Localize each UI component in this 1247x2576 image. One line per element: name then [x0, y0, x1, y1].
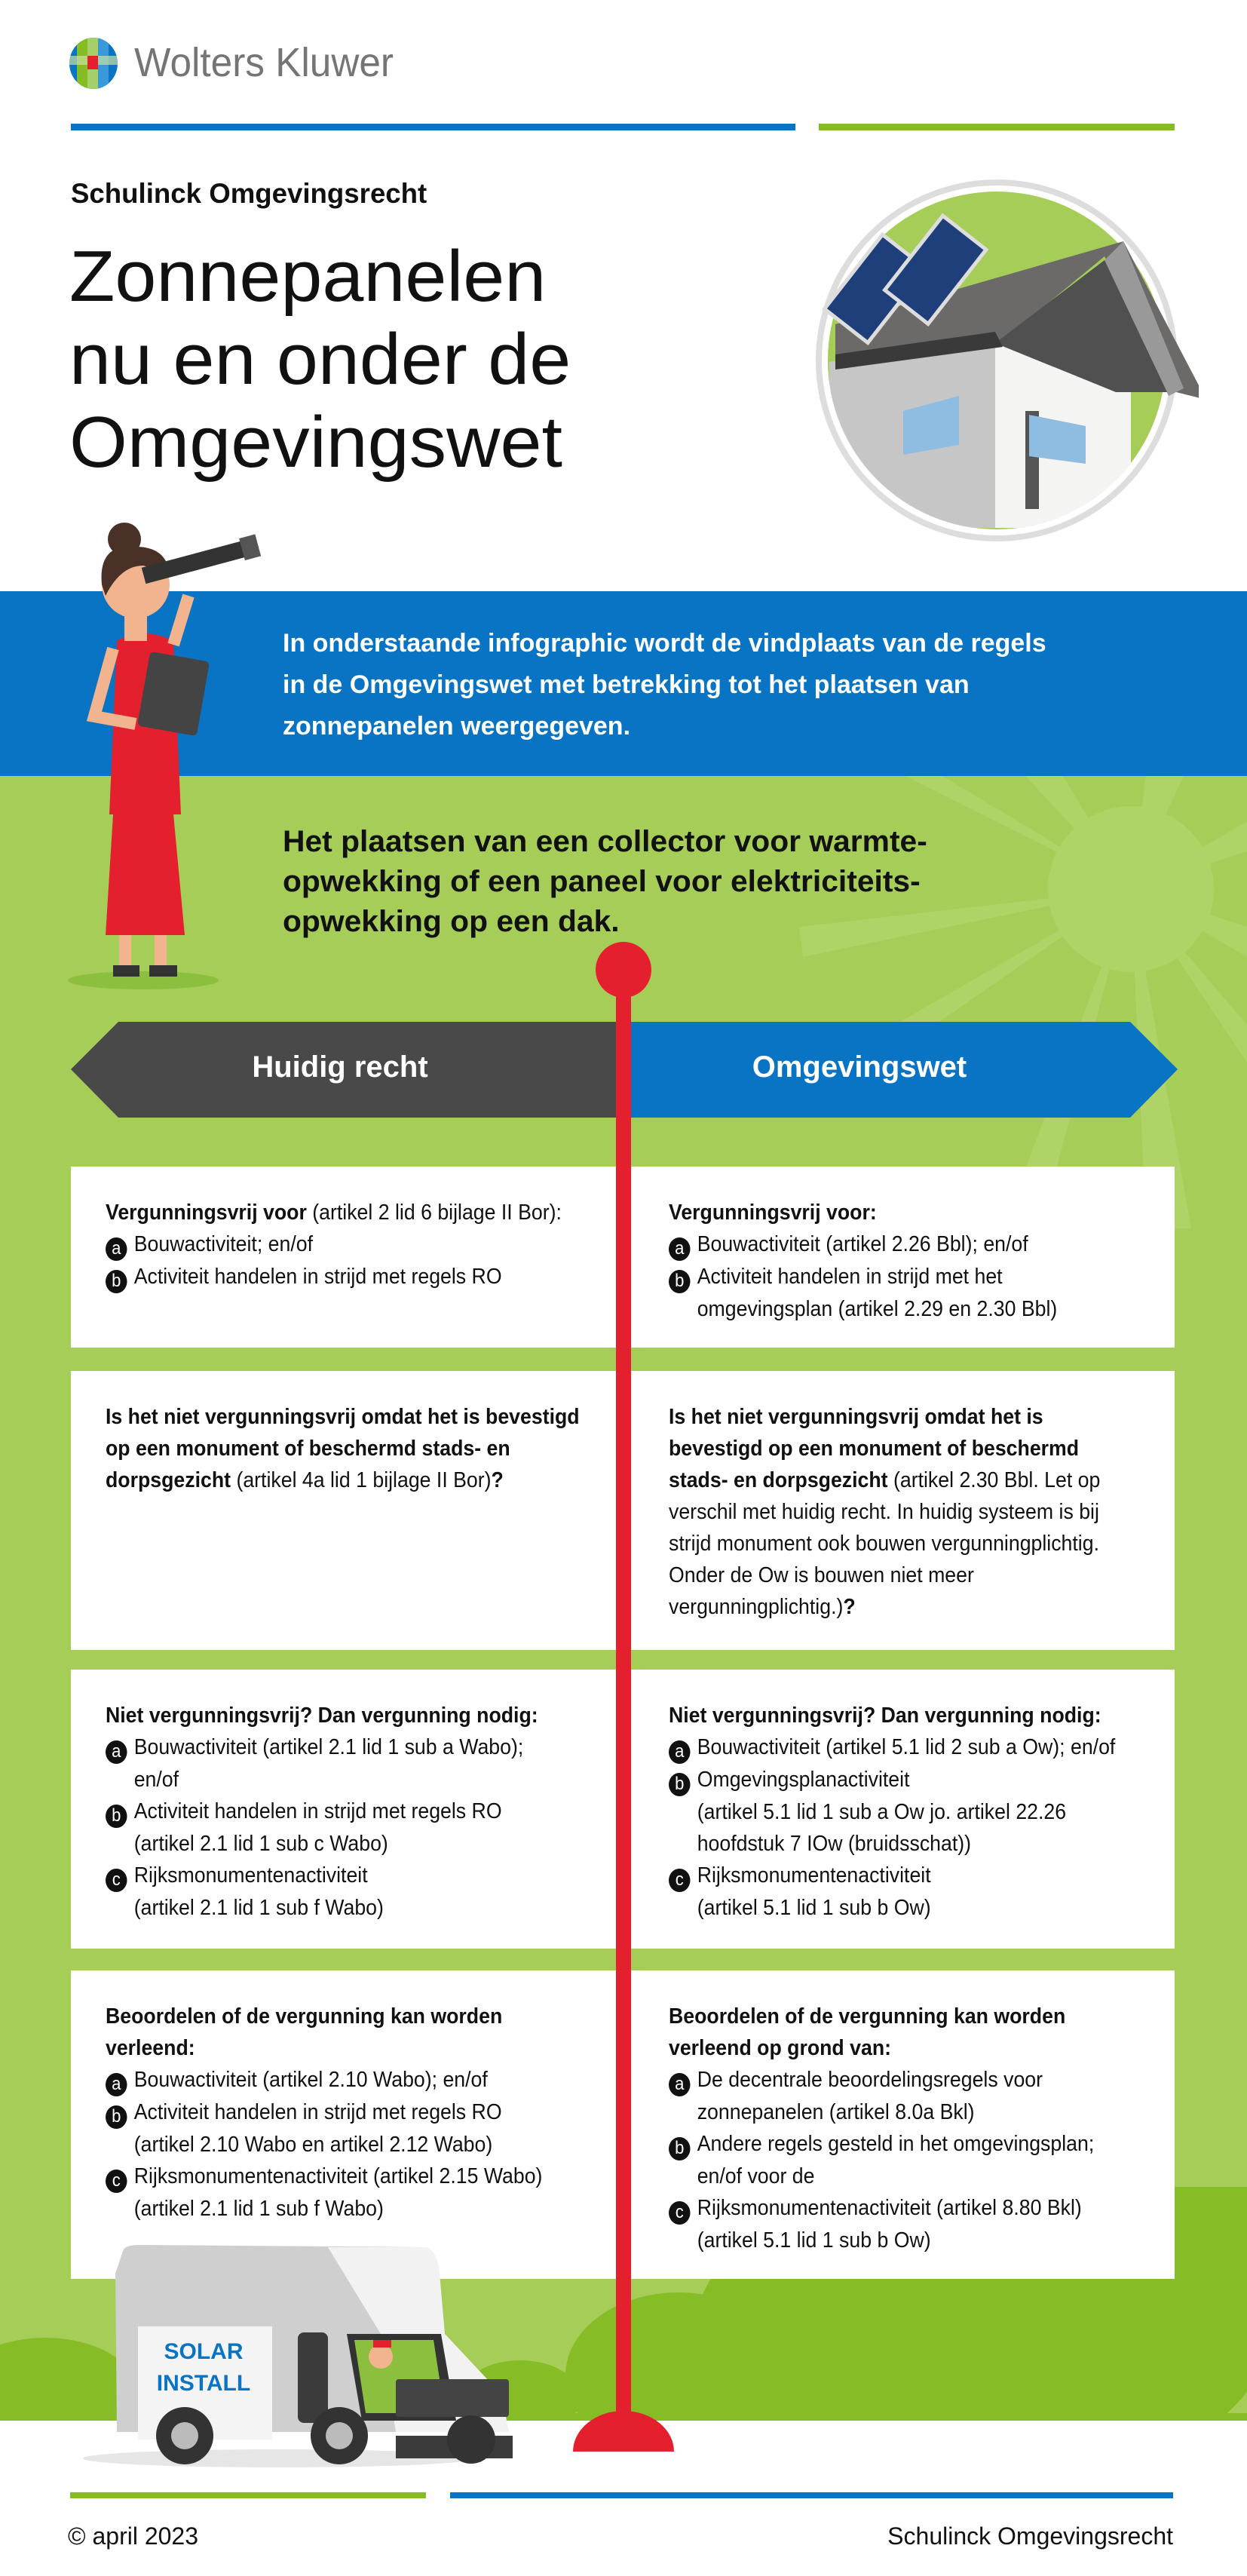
woman with telescope	[68, 523, 261, 989]
row 2 left: Is het niet vergunningsvrij omdat het is bevestigd	[106, 1405, 580, 1429]
row 3 left: (artikel 2.1 lid 1 sub c Wabo)	[134, 1832, 388, 1856]
title: Omgevingswet	[69, 402, 562, 483]
row 2 right: Onder de Ow is bouwen niet meer	[669, 1563, 974, 1587]
row 4 left: Bouwactiviteit (artikel 2.10 Wabo); en/of	[134, 2068, 488, 2092]
row 4 left	[71, 1970, 616, 2279]
row 4 left: b	[112, 2106, 121, 2127]
row 4 left: a	[112, 2074, 121, 2094]
row 1 right: b	[675, 1271, 684, 1291]
row 2 right: vergunningplichtig.)?	[669, 1595, 856, 1619]
row 2 right: verschil met huidig recht. In huidig systeem is bij	[669, 1500, 1099, 1524]
intro text: zonnepanelen weergegeven.	[283, 712, 630, 741]
row 3 right	[631, 1670, 1175, 1949]
blue band	[0, 591, 1247, 776]
row 4 left: c	[112, 2170, 121, 2191]
logo: Wolters Kluwer	[134, 40, 394, 85]
row 3 left: Activiteit handelen in strijd met regels RO	[134, 1799, 502, 1823]
row 4 left: Rijksmonumentenactiviteit (artikel 2.15 Wabo)	[134, 2164, 542, 2188]
row 1 right: Activiteit handelen in strijd met het	[697, 1265, 1003, 1289]
row 1 right: Vergunningsvrij voor:	[669, 1201, 877, 1225]
title	[69, 236, 571, 483]
row 4 right: c	[676, 2202, 684, 2222]
van: INSTALL	[157, 2371, 250, 2396]
intro text: In onderstaande infographic wordt de vindplaats van de regels	[283, 629, 1046, 658]
row 3 left: Niet vergunningsvrij? Dan vergunning nodig:	[106, 1704, 538, 1728]
bushes	[0, 2187, 1247, 2421]
row 1 right: a	[675, 1238, 684, 1259]
row 4 right: zonnepanelen (artikel 8.0a Bkl)	[697, 2100, 975, 2124]
row 3 right: c	[676, 1869, 684, 1890]
footer lines	[70, 2492, 426, 2498]
van	[83, 2245, 513, 2467]
row 1 left: a	[112, 1238, 121, 1259]
row 4 right: De decentrale beoordelingsregels voor	[697, 2068, 1043, 2092]
statement: opwekking op een dak.	[283, 905, 620, 938]
row 1 left: Bouwactiviteit; en/of	[134, 1232, 313, 1256]
row 4 right: Beoordelen of de vergunning kan worden	[669, 2004, 1065, 2029]
statement	[283, 825, 927, 938]
sun rays	[799, 776, 1247, 1228]
row 3 left	[71, 1670, 616, 1949]
row 3 right: a	[675, 1741, 684, 1762]
row 3 left: en/of	[134, 1768, 179, 1792]
footer right: Schulinck Omgevingsrecht	[887, 2522, 1173, 2550]
subtitle: Schulinck Omgevingsrecht	[71, 178, 427, 209]
row 4 right: Rijksmonumentenactiviteit (artikel 8.80 Bkl)	[697, 2196, 1082, 2220]
row 4 right: Andere regels gesteld in het omgevingsplan;	[697, 2132, 1094, 2156]
row 2 right	[631, 1371, 1175, 1650]
statement: opwekking of een paneel voor elektriciteits-	[283, 865, 921, 898]
green background	[0, 776, 1247, 2418]
arrow: Huidig recht: Huidig recht	[252, 1050, 428, 1084]
row 4 left: (artikel 2.1 lid 1 sub f Wabo)	[134, 2197, 384, 2221]
intro text	[283, 629, 1046, 741]
row 2 right: Is het niet vergunningsvrij omdat het is	[669, 1405, 1043, 1429]
row 3 left: c	[112, 1869, 121, 1890]
row 1 right: omgevingsplan (artikel 2.29 en 2.30 Bbl)	[697, 1297, 1057, 1321]
footer left: © april 2023	[68, 2522, 198, 2550]
row 1 right: Bouwactiviteit (artikel 2.26 Bbl); en/of	[697, 1232, 1028, 1256]
row 4 left: verleend:	[106, 2036, 195, 2060]
row 4 right: verleend op grond van:	[669, 2036, 891, 2060]
row 3 right: (artikel 5.1 lid 1 sub a Ow jo. artikel 22.26	[697, 1800, 1066, 1824]
row 3 left: a	[112, 1741, 121, 1762]
row 2 right: strijd monument ook bouwen vergunningplichtig.	[669, 1532, 1099, 1556]
row 3 left: (artikel 2.1 lid 1 sub f Wabo)	[134, 1896, 384, 1920]
row 3 left: Rijksmonumentenactiviteit	[134, 1863, 368, 1888]
statement: Het plaatsen van een collector voor warmte-	[283, 825, 927, 858]
arrow: Omgevingswet: Omgevingswet	[752, 1050, 967, 1084]
row 2 left	[71, 1371, 616, 1650]
row 3 right: Niet vergunningsvrij? Dan vergunning nodig:	[669, 1704, 1101, 1728]
row 3 right: Bouwactiviteit (artikel 5.1 lid 2 sub a Ow); en/of	[697, 1735, 1115, 1759]
title: Zonnepanelen	[69, 236, 546, 317]
arrow: Huidig recht	[71, 1022, 616, 1118]
row 4 right	[631, 1970, 1175, 2279]
redraw pole over boxes	[616, 972, 631, 2420]
row 4 right: a	[675, 2074, 684, 2094]
row 1 left: b	[112, 1271, 121, 1291]
row 1 left	[71, 1167, 616, 1348]
red pole	[93, 942, 1158, 2464]
title: nu en onder de	[69, 319, 571, 400]
row 2 left: dorpsgezicht (artikel 4a lid 1 bijlage II Bor)?	[106, 1468, 504, 1492]
row 4 right: (artikel 5.1 lid 1 sub b Ow)	[697, 2228, 931, 2252]
row 3 left: Bouwactiviteit (artikel 2.1 lid 1 sub a Wabo);	[134, 1735, 523, 1759]
van: SOLAR	[164, 2339, 243, 2364]
row 1 right	[631, 1167, 1175, 1348]
row 3 right: (artikel 5.1 lid 1 sub b Ow)	[697, 1896, 931, 1920]
row 1 left: Vergunningsvrij voor (artikel 2 lid 6 bijlage II Bor):	[106, 1201, 562, 1225]
illustration: house with solar panels	[816, 179, 1199, 541]
row 2 right: bevestigd op een monument of beschermd	[669, 1437, 1079, 1461]
row 4 left: (artikel 2.10 Wabo en artikel 2.12 Wabo)	[134, 2133, 492, 2157]
row 3 right: hoofdstuk 7 IOw (bruidsschat))	[697, 1832, 971, 1856]
row 1 left: Activiteit handelen in strijd met regels RO	[134, 1265, 502, 1289]
row 2 right: stads- en dorpsgezicht (artikel 2.30 Bbl. Let op	[669, 1468, 1100, 1492]
row 4 left: Beoordelen of de vergunning kan worden	[106, 2004, 502, 2029]
arrow: Omgevingswet	[631, 1022, 1178, 1118]
row 3 left: b	[112, 1805, 121, 1826]
row 3 right: b	[675, 1774, 684, 1794]
row 3 right: Omgevingsplanactiviteit	[697, 1768, 909, 1792]
row 4 left: Activiteit handelen in strijd met regels RO	[134, 2100, 502, 2124]
row 3 right: Rijksmonumentenactiviteit	[697, 1863, 931, 1888]
row 2 left: op een monument of beschermd stads- en	[106, 1437, 510, 1461]
row 4 right: b	[675, 2138, 684, 2158]
intro text: in de Omgevingswet met betrekking tot het plaatsen van	[283, 670, 970, 699]
row 4 right: en/of voor de	[697, 2164, 814, 2188]
